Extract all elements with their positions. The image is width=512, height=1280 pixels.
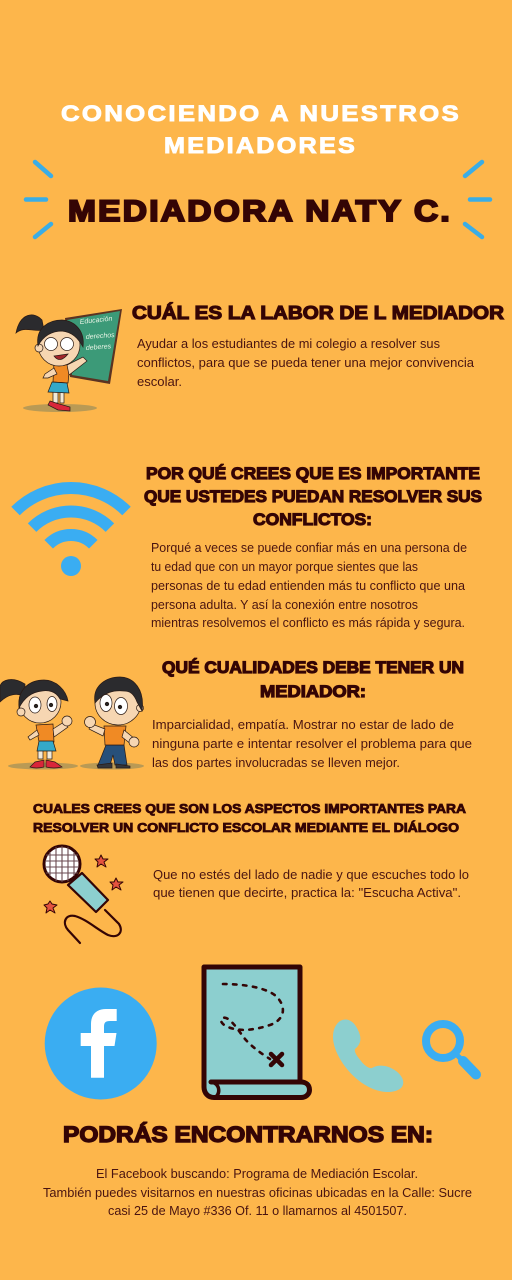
text block: contacto — [43, 1167, 472, 1218]
text block: cualidades — [152, 718, 472, 770]
shadow — [23, 404, 97, 412]
title: CONOCIENDO A NUESTROS — [61, 101, 461, 126]
handle — [68, 873, 108, 912]
text block: labor: conflictos, para que se pueda tener una mejor convivencia — [137, 356, 474, 370]
name heading: MEDIADORA NATY C. — [68, 195, 452, 228]
icon: microphone — [44, 846, 123, 943]
boy — [84, 677, 144, 768]
text block: aspectos: que tienen que decirte, practica la: "Escucha Activa". — [153, 886, 461, 900]
shadows — [8, 762, 144, 770]
icon: phone — [333, 1019, 403, 1092]
illustration: girl and boy — [0, 677, 144, 770]
text block: contacto: casi 25 de Mayo #336 Of. 11 o llamarnos al 4501507. — [108, 1204, 407, 1218]
illustration: girl at chalkboard — [16, 309, 122, 412]
text block: contacto: También puedes visitarnos en nuestras oficinas ubicadas en la Calle: Sucre — [43, 1186, 472, 1200]
text block: importancia: tu edad que con un mayor porque sientes que las — [151, 560, 418, 574]
chalkboard — [65, 309, 122, 384]
heading: cualidades — [162, 658, 464, 701]
title: MEDIADORES — [164, 133, 357, 158]
heading: labor del mediador: CUÁL ES LA LABOR DE L MEDIADOR — [132, 302, 504, 323]
chalkboard: derechos — [86, 332, 115, 341]
heading: aspectos: RESOLVER UN CONFLICTO ESCOLAR MEDIANTE EL DIÁLOGO — [33, 820, 459, 835]
icon: burst lines left — [26, 162, 51, 237]
heading: importancia: POR QUÉ CREES QUE ES IMPORTANTE — [146, 464, 480, 483]
cable — [65, 910, 121, 943]
text block: cualidades: ninguna parte e intentar resolver el problema para que — [152, 737, 472, 751]
chalkboard: deberes — [86, 343, 112, 352]
stars — [44, 855, 123, 913]
dashed route — [221, 984, 283, 1059]
girl — [0, 680, 72, 768]
heading: aspectos — [33, 802, 466, 835]
heading: importancia — [144, 464, 482, 529]
text block: labor — [137, 337, 474, 389]
x mark — [271, 1054, 282, 1065]
title — [61, 101, 461, 158]
head — [44, 846, 80, 882]
heading: importancia: QUE USTEDES PUEDAN RESOLVER SUS — [144, 487, 482, 506]
text block: labor: escolar. — [137, 375, 182, 389]
text block: importancia: persona adulta. Y así la conexión entre nosotros — [151, 598, 418, 612]
text block: importancia: Porqué a veces se puede confiar más en una persona de — [151, 541, 467, 555]
text block: cualidades: las dos partes involucradas se lleven mejor. — [152, 756, 400, 770]
heading: importancia: CONFLICTOS: — [253, 510, 372, 529]
icon: wifi — [16, 488, 126, 576]
heading: contacto: PODRÁS ENCONTRARNOS EN: — [63, 1122, 433, 1147]
icon: burst lines right — [465, 162, 490, 237]
chalkboard: Educación — [79, 316, 113, 326]
text block: labor: Ayudar a los estudiantes de mi colegio a resolver sus — [137, 337, 440, 351]
icon: facebook — [45, 988, 157, 1100]
heading: cualidades: QUÉ CUALIDADES DEBE TENER UN — [162, 658, 464, 677]
text block: importancia: personas de tu edad entienden más tu conflicto que una — [151, 579, 465, 593]
icon: magnifier — [426, 1024, 476, 1074]
heading: aspectos: CUALES CREES QUE SON LOS ASPECTOS IMPORTANTES PARA — [33, 802, 466, 816]
text block: importancia: mientras resolvemos el conflicto es más rápida y segura. — [151, 616, 465, 630]
text block: aspectos: Que no estés del lado de nadie y que escuches todo lo — [153, 868, 469, 882]
icon: map scroll — [204, 967, 310, 1098]
text block: aspectos — [153, 868, 469, 900]
heading: cualidades: MEDIADOR: — [260, 683, 366, 701]
text block: contacto: El Facebook buscando: Programa de Mediación Escolar. — [96, 1167, 418, 1181]
girl — [16, 315, 87, 411]
text block: cualidades: Imparcialidad, empatía. Mostrar no estar de lado de — [152, 718, 454, 732]
text block: importancia — [151, 541, 467, 630]
